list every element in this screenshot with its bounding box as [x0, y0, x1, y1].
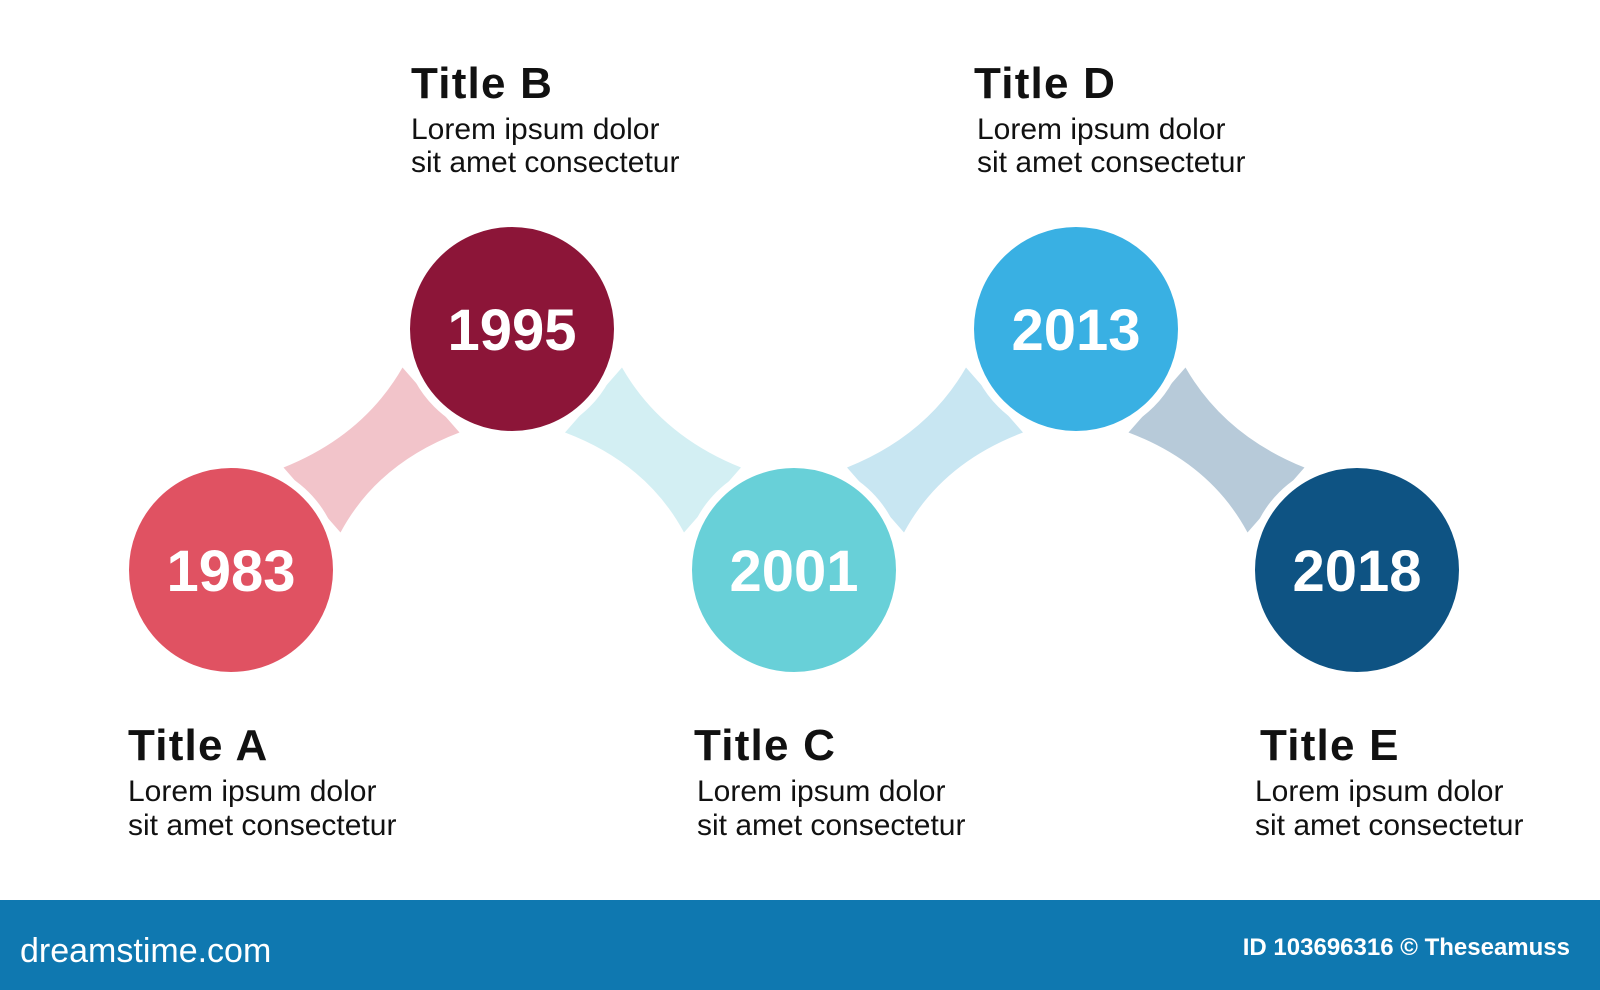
footer bar: dreamstime.com: [20, 932, 271, 970]
circle: 2018: 2018: [1292, 539, 1422, 604]
connector: B to C: [565, 368, 741, 532]
circle: 2013: [970, 223, 1182, 435]
text block: Title B: sit amet consectetur: [411, 146, 679, 179]
circle: 1995: [406, 223, 618, 435]
text block: Title A: Title A: [128, 721, 268, 770]
text block: Title B: Lorem ipsum dolor: [411, 113, 659, 146]
text block: Title E: [1255, 721, 1523, 842]
connector: D to E: [1128, 368, 1304, 532]
circle: 2001: [688, 464, 900, 676]
text block: Title D: Title D: [974, 59, 1116, 108]
circle: 2018: [1251, 464, 1463, 676]
connector: A to B: [284, 368, 460, 532]
text block: Title E: Title E: [1260, 721, 1400, 770]
text block: Title B: [411, 59, 679, 179]
text block: Title C: sit amet consectetur: [697, 809, 965, 842]
text block: Title C: Lorem ipsum dolor: [697, 775, 945, 808]
text block: Title D: Lorem ipsum dolor: [977, 113, 1225, 146]
text block: Title A: [128, 721, 396, 842]
text block: Title C: Title C: [694, 721, 836, 770]
connector: C to D: [847, 368, 1023, 532]
text block: Title D: sit amet consectetur: [977, 146, 1245, 179]
text block: Title B: Title B: [411, 59, 553, 108]
text block: Title E: Lorem ipsum dolor: [1255, 775, 1503, 808]
text block: Title C: [694, 721, 965, 842]
text block: Title A: Lorem ipsum dolor: [128, 775, 376, 808]
text block: Title D: [974, 59, 1245, 179]
footer bar: [0, 900, 1600, 990]
text block: Title E: sit amet consectetur: [1255, 809, 1523, 842]
circle: 1983: 1983: [166, 539, 296, 604]
footer bar: ID 103696316 © Theseamuss: [1243, 934, 1570, 961]
text block: Title A: sit amet consectetur: [128, 809, 396, 842]
circle: 1995: 1995: [447, 298, 577, 363]
circle: 2001: 2001: [729, 539, 859, 604]
circle: 1983: [125, 464, 337, 676]
circle: 2013: 2013: [1011, 298, 1141, 363]
